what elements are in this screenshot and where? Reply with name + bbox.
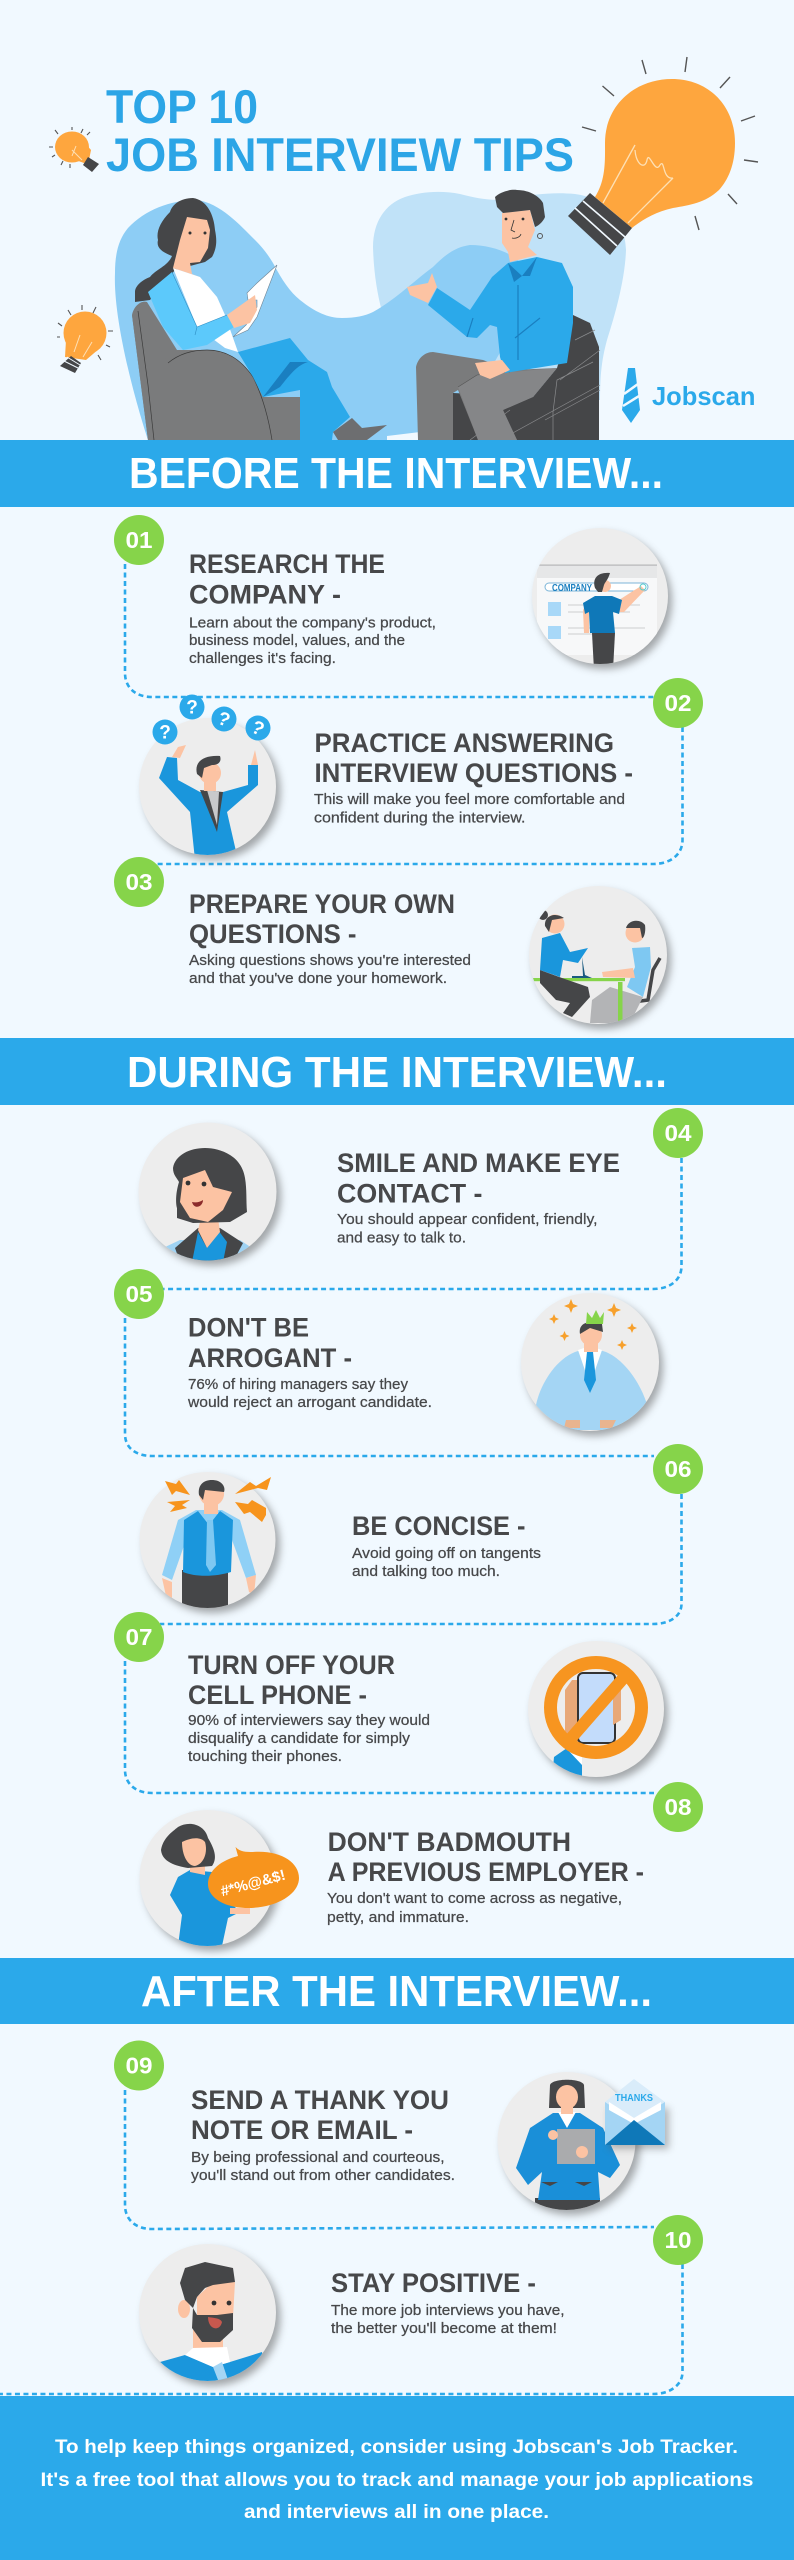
icon: large light bulb bbox=[568, 57, 758, 255]
badge 08 bbox=[653, 1782, 703, 1832]
footer panel: job tracker message: and interviews all in one place. bbox=[244, 2502, 549, 2523]
badge 04 bbox=[653, 1108, 703, 1158]
tip 04: smile and make eye contact bbox=[138, 1108, 703, 1266]
footer panel: job tracker message bbox=[0, 2396, 794, 2560]
heading: PREPARE YOUR OWN bbox=[189, 889, 455, 919]
badge 06: 06 bbox=[664, 1456, 692, 1482]
heading bbox=[337, 1148, 620, 1208]
description: challenges it's facing. bbox=[189, 650, 336, 667]
description: and that you've done your homework. bbox=[189, 970, 447, 987]
heading bbox=[328, 1827, 644, 1887]
description bbox=[314, 791, 625, 826]
woman's chair bbox=[132, 302, 301, 440]
title bbox=[106, 80, 574, 181]
illustration: frustrated man bbox=[140, 1472, 280, 1613]
description: You should appear confident, friendly, bbox=[337, 1211, 598, 1228]
description: would reject an arrogant candidate. bbox=[187, 1394, 432, 1411]
footer panel: job tracker message: To help keep things organized, consider using Jobscan's Job Tracker. bbox=[55, 2437, 738, 2458]
speech bubble: #*%@&$! bbox=[219, 1867, 287, 1900]
badge 09: 09 bbox=[126, 2052, 152, 2078]
heading bbox=[188, 1312, 352, 1373]
badge 07 bbox=[114, 1612, 164, 1662]
heading bbox=[189, 889, 455, 949]
illustration: angry woman with speech bubble bbox=[140, 1810, 299, 1951]
description bbox=[189, 614, 436, 667]
heading: INTERVIEW QUESTIONS - bbox=[314, 758, 633, 788]
question mark bubbles: ? bbox=[159, 722, 171, 744]
description: 90% of interviewers say they would bbox=[188, 1712, 430, 1729]
description: touching their phones. bbox=[188, 1748, 342, 1765]
connector: dashed path linking steps bbox=[0, 564, 682, 2394]
illustration: bearded man bbox=[139, 2244, 280, 2386]
heading bbox=[189, 549, 385, 610]
illustration: person searching company: COMPANY bbox=[552, 583, 592, 594]
description: You don't want to come across as negative, bbox=[327, 1890, 622, 1907]
badge 03: 03 bbox=[126, 869, 152, 895]
description bbox=[189, 952, 471, 987]
tip 06: be concise bbox=[140, 1444, 703, 1613]
heading: RESEARCH THE bbox=[189, 549, 385, 579]
blob: left and middle bbox=[115, 200, 530, 440]
banner: during the interview: DURING THE INTERVIEW... bbox=[127, 1048, 667, 1097]
tip 03: prepare your own questions bbox=[114, 857, 671, 1029]
tip 02: practice answering bbox=[139, 678, 703, 860]
tip 10: stay positive bbox=[139, 2215, 703, 2386]
illustration: arrogant man with crown bbox=[521, 1293, 663, 1436]
heading: QUESTIONS - bbox=[189, 919, 356, 949]
banner: before the interview bbox=[0, 440, 794, 507]
badge 04: 04 bbox=[664, 1120, 692, 1146]
banner: after the interview: AFTER THE INTERVIEW... bbox=[141, 1967, 652, 2016]
description bbox=[187, 1376, 432, 1411]
title: TOP 10 bbox=[106, 80, 258, 133]
description: business model, values, and the bbox=[189, 632, 405, 649]
description bbox=[352, 1545, 541, 1580]
heading bbox=[314, 728, 633, 788]
badge 02: 02 bbox=[664, 690, 692, 716]
tip 09: send a thank you note bbox=[114, 2040, 669, 2215]
tip 07: turn off your cell phone bbox=[114, 1612, 668, 1782]
title: JOB INTERVIEW TIPS bbox=[106, 128, 574, 181]
heading: SEND A THANK YOU bbox=[191, 2085, 449, 2115]
logo: Jobscan bbox=[622, 368, 756, 423]
illustration: smiling woman bbox=[138, 1122, 281, 1266]
description: and talking too much. bbox=[352, 1563, 500, 1580]
heading: TURN OFF YOUR bbox=[188, 1650, 395, 1680]
badge 07: 07 bbox=[126, 1624, 152, 1650]
heading: SMILE AND MAKE EYE bbox=[337, 1148, 620, 1178]
badge 10: 10 bbox=[664, 2227, 692, 2253]
tip 01: research the company bbox=[114, 515, 672, 670]
woman bbox=[135, 198, 387, 440]
heading: A PREVIOUS EMPLOYER - bbox=[328, 1857, 644, 1887]
badge 08: 08 bbox=[664, 1794, 692, 1820]
description bbox=[327, 1890, 622, 1926]
description: This will make you feel more comfortable and bbox=[314, 791, 625, 808]
illustration: no phone sign bbox=[528, 1641, 668, 1782]
heading: CONTACT - bbox=[337, 1178, 482, 1208]
description: The more job interviews you have, bbox=[331, 2302, 564, 2319]
banner: after the interview bbox=[0, 1958, 794, 2024]
description: the better you'll become at them! bbox=[331, 2320, 557, 2337]
icon: small bulb lower left bbox=[57, 305, 113, 373]
heading: BE CONCISE - bbox=[352, 1511, 526, 1541]
sparkle stars bbox=[549, 1299, 637, 1350]
description bbox=[188, 1712, 430, 1765]
description: Avoid going off on tangents bbox=[352, 1545, 541, 1562]
description: and easy to talk to. bbox=[337, 1230, 466, 1246]
heading: PRACTICE ANSWERING bbox=[314, 728, 614, 758]
badge 05: 05 bbox=[126, 1281, 153, 1307]
description: Asking questions shows you're interested bbox=[189, 952, 471, 969]
heading bbox=[191, 2085, 449, 2145]
man bbox=[407, 190, 573, 440]
badge 01 bbox=[114, 515, 164, 565]
tip 08: don't badmouth a previous employer bbox=[140, 1782, 703, 1951]
heading: CELL PHONE - bbox=[188, 1680, 367, 1710]
question mark bubbles: ? bbox=[215, 708, 233, 732]
heading: DON'T BADMOUTH bbox=[328, 1827, 571, 1857]
footer panel: job tracker message: It's a free tool that allows you to track and manage your job applications bbox=[40, 2470, 754, 2491]
envelope with thanks: THANKS bbox=[615, 2093, 653, 2104]
badge 01: 01 bbox=[126, 527, 153, 553]
badge 05 bbox=[114, 1269, 164, 1319]
tip 05: don't be arrogant bbox=[114, 1269, 663, 1436]
description bbox=[191, 2149, 455, 2184]
question mark bubbles: ? bbox=[186, 698, 198, 718]
heading: NOTE OR EMAIL - bbox=[191, 2115, 413, 2145]
icon: small bulb by title bbox=[49, 127, 99, 172]
blob: back right bbox=[373, 192, 626, 400]
description bbox=[331, 2302, 564, 2337]
illustration: woman with clipboard bbox=[498, 2072, 669, 2215]
description: confident during the interview. bbox=[314, 810, 526, 826]
logo: Jobscan: Jobscan bbox=[652, 381, 756, 411]
anger bolts bbox=[165, 1477, 271, 1522]
heading: STAY POSITIVE - bbox=[331, 2268, 536, 2298]
description: 76% of hiring managers say they bbox=[188, 1376, 409, 1393]
speech bubble bbox=[208, 1847, 299, 1908]
badge 10 bbox=[653, 2215, 703, 2265]
badge 09 bbox=[114, 2040, 164, 2090]
description: Learn about the company's product, bbox=[189, 614, 436, 632]
banner: before the interview: BEFORE THE INTERVIEW... bbox=[129, 449, 663, 498]
description: petty, and immature. bbox=[327, 1909, 469, 1926]
description: you'll stand out from other candidates. bbox=[191, 2167, 455, 2184]
illustration: interview scene bbox=[115, 190, 626, 440]
question mark bubbles: ? bbox=[248, 717, 267, 741]
illustration: man with question marks bbox=[139, 694, 280, 860]
question mark bubbles bbox=[152, 694, 270, 744]
badge 03 bbox=[114, 857, 164, 907]
heading: COMPANY - bbox=[189, 580, 341, 610]
heading bbox=[188, 1650, 395, 1710]
badge 02 bbox=[653, 678, 703, 728]
heading: ARROGANT - bbox=[188, 1343, 352, 1373]
description: By being professional and courteous, bbox=[191, 2149, 444, 2166]
description: disqualify a candidate for simply bbox=[188, 1730, 411, 1747]
heading: DON'T BE bbox=[188, 1312, 309, 1342]
envelope with thanks bbox=[605, 2079, 669, 2149]
man's chair bbox=[453, 315, 600, 440]
illustration: person searching company bbox=[532, 528, 672, 670]
description bbox=[337, 1211, 598, 1246]
banner: during the interview bbox=[0, 1038, 794, 1105]
badge 06 bbox=[653, 1444, 703, 1494]
illustration: two people at a desk bbox=[529, 886, 671, 1029]
